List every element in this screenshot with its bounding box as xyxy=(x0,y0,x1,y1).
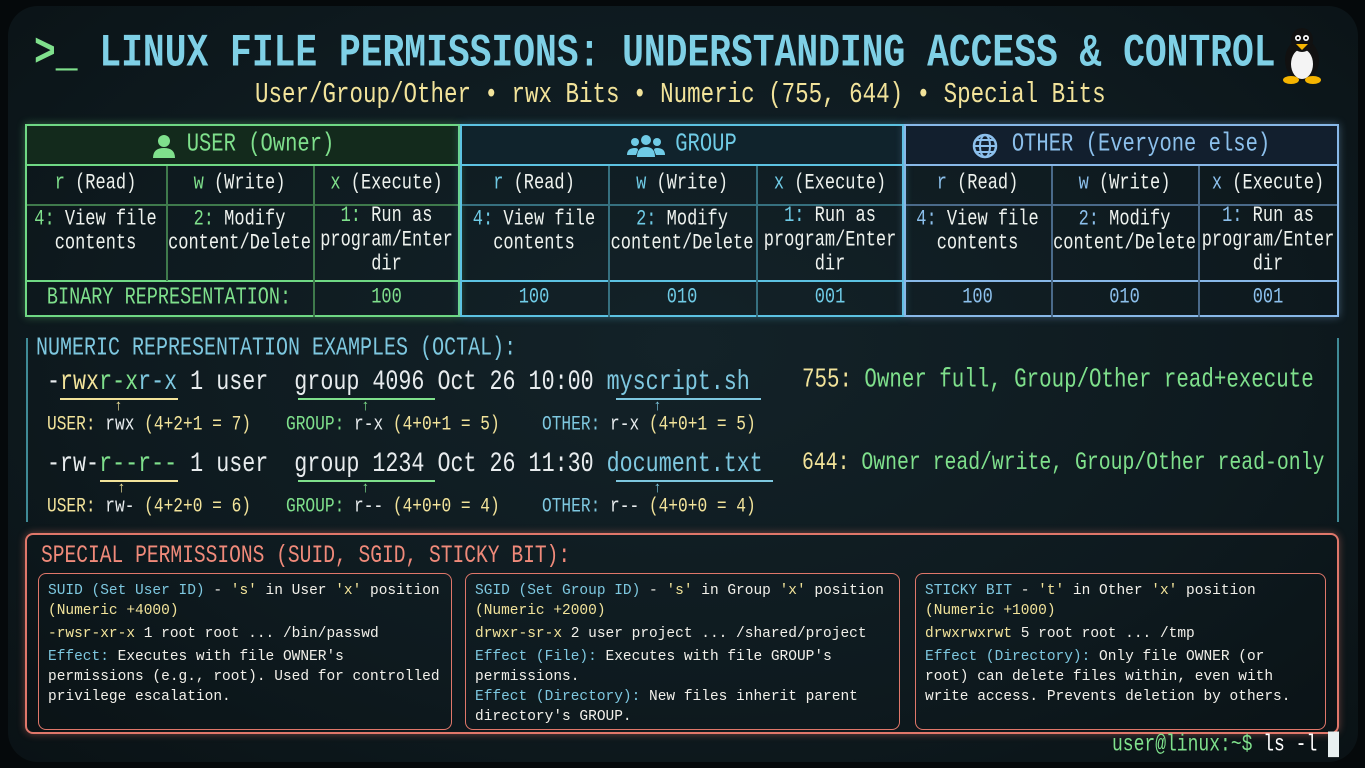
text: 1: Run as xyxy=(341,204,432,229)
text: BINARY REPRESENTATION: xyxy=(47,284,291,311)
heading: special: SPECIAL PERMISSIONS (SUID, SGID, STICKY BIT): xyxy=(41,541,570,569)
panel: numeric examples: ↑ xyxy=(114,398,123,415)
box: SGID: drwxr-sr-x 2 user project ... /shared/project xyxy=(475,626,867,642)
heading: other: OTHER (Everyone else) xyxy=(1012,130,1270,160)
text: w (Write) xyxy=(1079,172,1170,196)
text: 2: Modify xyxy=(194,208,285,232)
panel: other xyxy=(904,124,1339,317)
box: sticky: drwxrwxrwt 5 root root ... /tmp xyxy=(925,626,1195,642)
text: w (Write) xyxy=(194,172,285,196)
panel: numeric examples xyxy=(26,338,1339,522)
heading: user: USER (Owner) xyxy=(187,130,334,160)
panel: numeric examples: ↑ xyxy=(361,480,370,497)
heading: group: GROUP xyxy=(675,130,737,160)
subtitle: User/Group/Other • rwx Bits • Numeric (755, 644) • Special Bits xyxy=(255,78,1106,111)
text: 010 xyxy=(667,286,697,310)
text: x (Execute) xyxy=(1212,172,1324,196)
panel: numeric examples: GROUP: r-- (4+0+0 = 4) xyxy=(286,495,500,518)
text: 100 xyxy=(371,286,402,310)
panel: user xyxy=(25,124,460,317)
text: 001 xyxy=(815,286,845,310)
text: 1: Run as xyxy=(1222,204,1314,229)
text: 1: Run as xyxy=(784,204,876,229)
text: 100 xyxy=(962,286,993,310)
text: 4: View file xyxy=(473,208,595,232)
box: SGID: SGID (Set Group ID) - 's' in Group 'x' position (Numeric +2000) xyxy=(475,583,884,619)
text: contents xyxy=(55,232,136,256)
panel: numeric examples: ↑ xyxy=(653,398,662,415)
text: 100 xyxy=(519,286,549,310)
text: 4: View file xyxy=(916,208,1039,232)
text: dir xyxy=(371,253,402,277)
text: content/Delete xyxy=(611,232,753,256)
labels 2: USER: rw- (4+2+0 = 6) xyxy=(47,495,251,518)
box: SUID xyxy=(38,573,452,730)
text: x (Execute) xyxy=(774,172,886,196)
heading: group xyxy=(627,130,737,160)
text: content/Delete xyxy=(168,232,311,256)
box: sticky: Effect (Directory): Only file OWNER (or root) can delete files within, even with write access. Prevents deletion by others. xyxy=(925,649,1290,705)
text: 2: Modify xyxy=(1079,208,1170,232)
box: SUID: SUID (Set User ID) - 's' in User 'x' position (Numeric +4000) xyxy=(48,583,440,619)
description 755: 755: Owner full, Group/Other read+execute xyxy=(802,366,1314,396)
table cells xyxy=(34,172,1334,311)
panel: numeric examples: ↑ xyxy=(361,398,370,415)
panel: group xyxy=(460,124,904,317)
text: 2: Modify xyxy=(636,208,728,232)
heading: numeric: NUMERIC REPRESENTATION EXAMPLES (OCTAL): xyxy=(36,334,516,364)
text: w (Write) xyxy=(636,172,728,196)
panel: numeric examples: OTHER: r-- (4+0+0 = 4) xyxy=(542,495,756,518)
text: dir xyxy=(1253,253,1283,277)
panel: special permissions xyxy=(25,533,1339,734)
text: program/Enter xyxy=(764,229,896,253)
box: SUID: Effect: Executes with file OWNER's permissions (e.g., root). Used for controlled privilege escalation. xyxy=(48,649,440,705)
text: program/Enter xyxy=(320,229,453,253)
box: SGID xyxy=(465,573,900,730)
box: sticky: STICKY BIT - 't' in Other 'x' position (Numeric +1000) xyxy=(925,583,1256,619)
panel: permission table xyxy=(20,119,1344,322)
panel: numeric examples: ↑ xyxy=(117,480,126,497)
panel: numeric examples: GROUP: r-x (4+0+1 = 5) xyxy=(286,413,500,436)
title: >_ LINUX FILE PERMISSIONS: UNDERSTANDING ACCESS & CONTROL xyxy=(34,27,1276,80)
text: 4: View file xyxy=(34,208,157,232)
text: program/Enter xyxy=(1202,229,1334,253)
text: 001 xyxy=(1253,286,1283,310)
description 644: 644: Owner read/write, Group/Other read-only xyxy=(802,448,1324,476)
text: contents xyxy=(493,232,575,256)
box: SGID: Effect (File): Executes with file GROUP's permissions. xyxy=(475,649,832,685)
panel: numeric examples: ↑ xyxy=(653,480,662,497)
text: content/Delete xyxy=(1053,232,1196,256)
prompt: user@linux:~$ ls -l xyxy=(1112,732,1317,758)
labels 1: USER: rwx (4+2+1 = 7) xyxy=(47,413,251,436)
panel: numeric examples: OTHER: r-x (4+0+1 = 5) xyxy=(542,413,756,436)
text: 010 xyxy=(1109,286,1140,310)
text: r (Read) xyxy=(55,172,136,196)
text: r (Read) xyxy=(937,172,1018,196)
ls line 2: -rw-r--r-- 1 user group 1234 Oct 26 11:30 document.txt xyxy=(47,448,763,480)
text: dir xyxy=(815,253,845,277)
box: SGID: Effect (Directory): New files inherit parent directory's GROUP. xyxy=(475,689,858,725)
ls line 1: -rwxr-xr-x 1 user group 4096 Oct 26 10:00 myscript.sh xyxy=(47,366,750,398)
text: contents xyxy=(937,232,1018,256)
text: r (Read) xyxy=(493,172,575,196)
box: SUID: -rwsr-xr-x 1 root root ... /bin/passwd xyxy=(48,626,379,642)
icon: penguin xyxy=(1283,29,1321,84)
box: sticky xyxy=(915,573,1326,730)
text: x (Execute) xyxy=(330,172,443,196)
